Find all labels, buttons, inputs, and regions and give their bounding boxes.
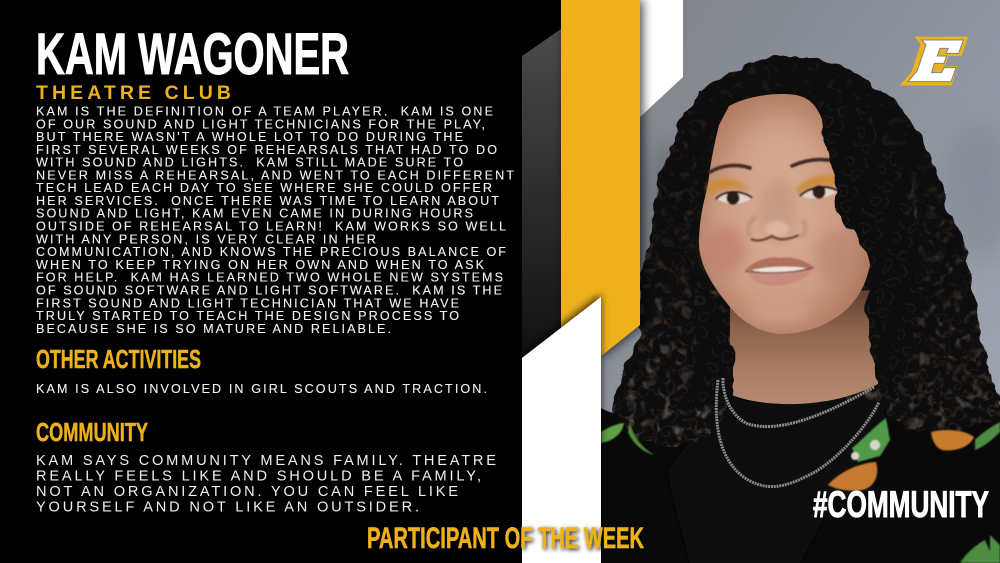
eyeshadow xyxy=(707,175,838,197)
footer label: PARTICIPANT OF THE WEEK xyxy=(367,522,644,555)
main text block: NEVER MISS A REHEARSAL, AND WENT TO EACH DIFFERENT xyxy=(36,168,514,182)
eyes xyxy=(716,186,838,204)
other activities heading: OTHER ACTIVITIES xyxy=(36,344,201,374)
face xyxy=(699,94,870,334)
community heading: COMMUNITY xyxy=(36,417,148,447)
nose xyxy=(748,216,806,240)
main text block: SOUND AND LIGHT, KAM EVEN CAME IN DURING HOURS xyxy=(36,207,473,221)
main text block: TRULY STARTED TO TEACH THE DESIGN PROCESS TO xyxy=(36,309,459,323)
floral print xyxy=(601,418,1000,563)
community text: REALLY FEELS LIKE AND SHOULD BE A FAMILY, xyxy=(36,468,481,484)
main text block xyxy=(36,104,514,336)
main text block: WHEN TO KEEP TRYING ON HER OWN AND WHEN TO ASK xyxy=(36,258,485,272)
community text: KAM SAYS COMMUNITY MEANS FAMILY. THEATRE xyxy=(36,453,496,469)
main text block: BECAUSE SHE IS SO MATURE AND RELIABLE. xyxy=(36,322,391,336)
main text block: FIRST SEVERAL WEEKS OF REHEARSALS THAT HAD TO DO xyxy=(36,143,497,157)
community text: NOT AN ORGANIZATION. YOU CAN FEEL LIKE xyxy=(36,484,458,500)
main text block: FOR HELP. KAM HAS LEARNED TWO WHOLE NEW SYSTEMS xyxy=(36,271,503,285)
main text block: WITH SOUND AND LIGHTS. KAM STILL MADE SURE TO xyxy=(36,156,463,170)
main text block: FIRST SOUND AND LIGHT TECHNICIAN THAT WE HAVE xyxy=(36,296,459,310)
mouth xyxy=(745,258,815,286)
main text block: OUTSIDE OF REHEARSAL TO LEARN! KAM WORKS SO WELL xyxy=(36,220,506,234)
top white strip xyxy=(640,0,683,117)
neck xyxy=(730,290,880,404)
main text block: OF SOUND SOFTWARE AND LIGHT SOFTWARE. KAM IS THE xyxy=(36,284,502,298)
main text block: COMMUNICATION, AND KNOWS THE PRECIOUS BALANCE OF xyxy=(36,245,506,259)
main text block: TECH LEAD EACH DAY TO SEE WHERE SHE COULD OFFER xyxy=(36,181,492,195)
hair over face edge xyxy=(691,100,920,402)
short necklace xyxy=(723,378,874,427)
gold band xyxy=(561,0,640,356)
title: KAM WAGONER xyxy=(36,22,349,87)
student portrait photo xyxy=(600,0,1000,563)
community text: YOURSELF AND NOT LIKE AN OUTSIDER. xyxy=(36,500,419,516)
main text block: WITH ANY PERSON, IS VERY CLEAR IN HER xyxy=(36,232,376,246)
main text block: BUT THERE WASN'T A WHOLE LOT TO DO DURING THE xyxy=(36,130,463,144)
hair xyxy=(600,50,1000,460)
shirt xyxy=(601,385,1000,563)
lower white band xyxy=(522,297,601,563)
other activities text: KAM IS ALSO INVOLVED IN GIRL SCOUTS AND TRACTION. xyxy=(36,382,487,396)
dark gradient band xyxy=(522,29,561,359)
long necklace xyxy=(716,380,879,487)
main text block: HER SERVICES. ONCE THERE WAS TIME TO LEARN ABOUT xyxy=(36,194,499,208)
main text block: KAM IS THE DEFINITION OF A TEAM PLAYER. KAM IS ONE xyxy=(36,104,493,118)
community text xyxy=(36,453,496,516)
icon: E logo xyxy=(900,37,968,85)
subtitle: THEATRE CLUB xyxy=(36,82,231,104)
eyebrows xyxy=(710,160,835,172)
main text block: OF OUR SOUND AND LIGHT TECHNICIANS FOR THE PLAY, xyxy=(36,117,485,131)
photo backdrop xyxy=(601,0,1000,563)
